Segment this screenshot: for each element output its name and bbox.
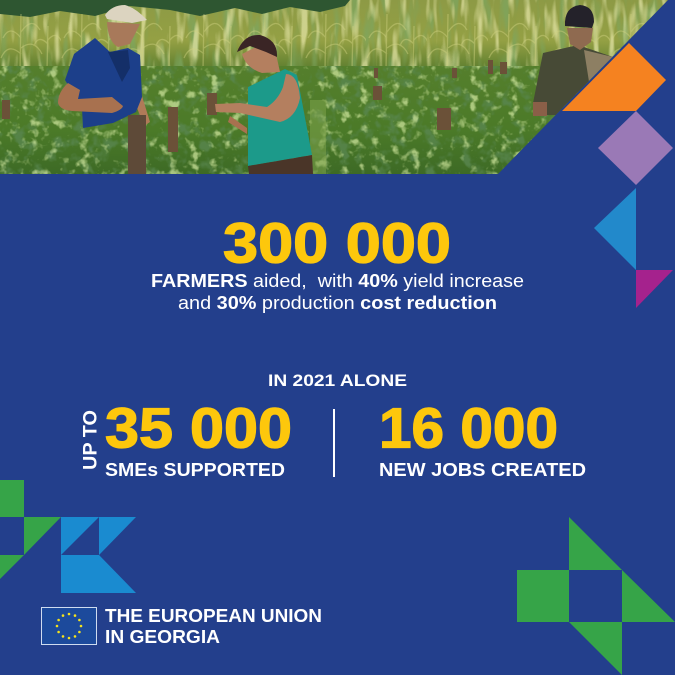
stat: SMEs supported: UP TO <box>80 410 102 470</box>
logo: EU flag <box>42 608 96 644</box>
shape: blue triangle <box>594 188 636 270</box>
decorative shapes: bottom right <box>517 517 675 675</box>
description text: and 30% production cost reduction <box>178 293 497 313</box>
decorative shapes: bottom left <box>0 480 136 593</box>
description text: FARMERS aided, with 40% yield increase <box>151 271 524 291</box>
logo text <box>105 605 322 647</box>
photo: farmers in a field <box>0 0 675 174</box>
stat: new jobs: NEW JOBS CREATED <box>379 459 586 480</box>
stat: new jobs: 16 000 <box>379 396 558 460</box>
shape: magenta triangle <box>636 270 673 308</box>
fence post <box>128 115 146 174</box>
shape: purple diamond <box>598 111 673 185</box>
headline number: 300 000 <box>223 212 451 276</box>
subheading: IN 2021 ALONE <box>268 372 407 390</box>
person: man in olive shirt <box>533 5 612 116</box>
person: man in blue polo <box>58 5 150 128</box>
decorative shapes: top right <box>562 43 673 308</box>
logo text: THE EUROPEAN UNION <box>105 605 322 626</box>
stat: SMEs supported <box>80 396 292 480</box>
stat: SMEs supported: 35 000 <box>105 396 292 460</box>
person: woman in teal top <box>215 35 313 174</box>
description text <box>151 271 524 313</box>
shape: orange <box>562 43 666 111</box>
divider <box>333 409 335 477</box>
stat: new jobs <box>379 396 586 480</box>
stat: SMEs supported: SMEs SUPPORTED <box>105 459 285 480</box>
logo text: IN GEORGIA <box>105 626 220 647</box>
